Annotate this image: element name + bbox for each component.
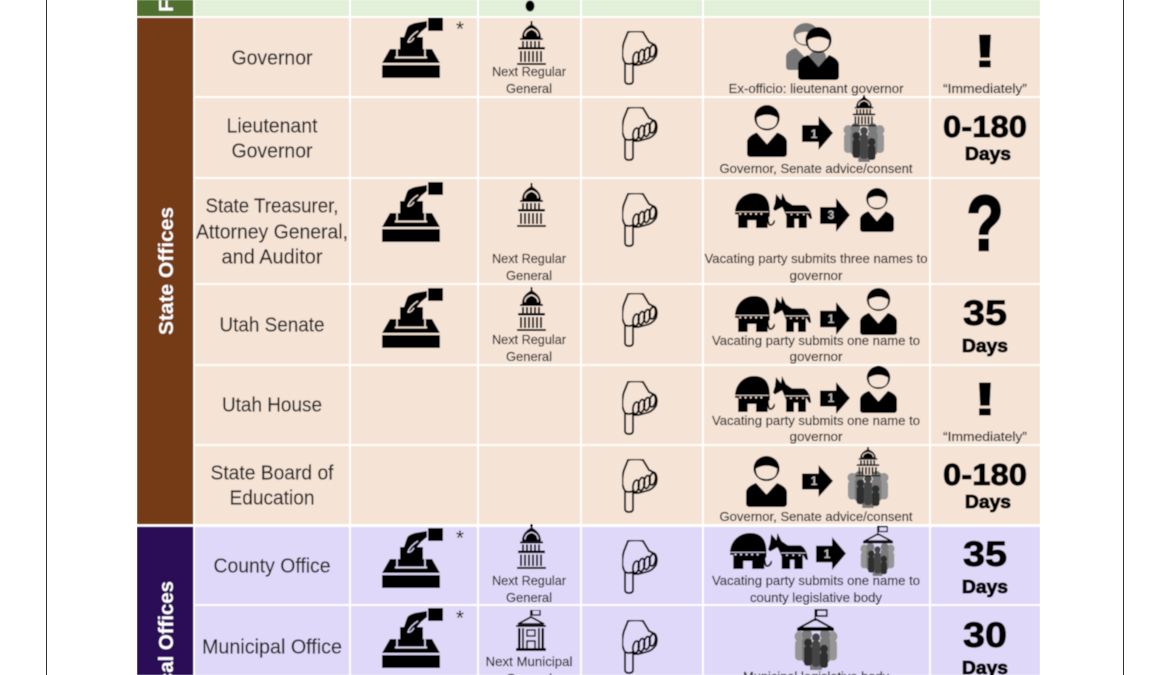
office name: Utah Senate: [220, 315, 324, 337]
table content: [137, 0, 1040, 675]
icon: thumb down: [622, 540, 657, 593]
icon: arrow 1: 1: [824, 547, 831, 561]
office name: Education: [230, 488, 314, 510]
caption: Vacating party submits three names to: [704, 251, 928, 266]
icon: governor: [747, 105, 787, 157]
icon: arrow 1: [820, 382, 850, 414]
row: municipal office: [195, 606, 1040, 675]
question mark: ?: [966, 179, 1004, 267]
office name: Utah House: [222, 395, 322, 417]
icon: thumb down: [622, 459, 657, 512]
office name: Governor: [232, 141, 313, 163]
caption: county legislative body: [750, 590, 882, 605]
days: Days: [965, 492, 1011, 512]
icon: parties: [735, 193, 812, 228]
caption: governor: [790, 349, 843, 364]
section label: state offices: State Offices: [155, 207, 178, 335]
icon: senate: [843, 95, 885, 162]
icon: arrow 1: 1: [828, 391, 835, 405]
caption: Governor, Senate advice/consent: [720, 161, 913, 176]
icon: arrow 3: [820, 198, 850, 232]
caption: Vacating party submits one name to: [712, 573, 920, 588]
icon: arrow 1: [820, 302, 850, 335]
bullet: [526, 0, 534, 12]
days: Days: [965, 144, 1011, 164]
next regular general: Next Regular: [492, 573, 567, 588]
icon: senate: [847, 447, 889, 508]
icon: ballot box: [382, 182, 443, 242]
icon: arrow 1: 1: [811, 474, 818, 488]
next regular general: General: [506, 590, 552, 605]
icon: governor: [746, 456, 787, 507]
office name: Municipal Office: [202, 637, 342, 659]
row: governor: [195, 18, 1040, 96]
icon: ballot box: [382, 608, 443, 668]
immediately: “Immediately”: [943, 429, 1027, 444]
icon: municipal legislative body: [794, 609, 838, 670]
days: 35: [963, 294, 1007, 333]
icon: ballot box: [382, 18, 443, 78]
icon: governor: [860, 288, 897, 335]
icon: arrow 1: 1: [828, 312, 835, 326]
caption: Ex-officio: lieutenant governor: [728, 81, 904, 96]
days: 30: [963, 616, 1007, 655]
icon: governor: [860, 366, 897, 413]
asterisk: *: [456, 527, 464, 550]
icon: parties: [730, 533, 808, 569]
days: 0-180: [943, 457, 1027, 492]
icon: capitol: [517, 21, 546, 65]
days: 35: [963, 535, 1007, 574]
icon: capitol: [517, 287, 546, 331]
immediately: “Immediately”: [943, 81, 1027, 96]
days: [962, 616, 1008, 675]
icon: thumb down: [622, 107, 657, 160]
section label: local offices: [137, 527, 193, 675]
icon: ex-officio persons: [786, 23, 839, 80]
icon: capitol: [517, 524, 546, 569]
icon: county legislative body: [860, 526, 895, 576]
office name: County Office: [214, 556, 330, 578]
icon: arrow 1: [816, 537, 846, 570]
office name: Attorney General,: [196, 222, 348, 244]
icon: capitol: [517, 183, 546, 227]
icon: arrow 1: 1: [811, 127, 818, 141]
next regular general: General: [506, 81, 552, 96]
next regular general: General: [506, 349, 552, 364]
icon: thumb down: [622, 381, 657, 434]
days: [962, 535, 1008, 597]
row: treasurer, attorney general, auditor: [195, 179, 1040, 283]
exclamation: !: [973, 373, 997, 425]
row: state board of education: [195, 446, 1040, 524]
days: 0-180: [943, 109, 1027, 144]
icon: arrow 1: [802, 465, 833, 497]
icon: thumb down: [622, 31, 657, 84]
caption: governor: [790, 429, 843, 444]
office name: State Treasurer,: [206, 196, 338, 218]
icon: thumb down: [622, 293, 657, 346]
caption: Vacating party submits one name to: [712, 413, 920, 428]
caption: Vacating party submits one name to: [712, 333, 920, 348]
row: utah house: [195, 366, 1040, 444]
icon: governor: [860, 188, 894, 232]
days: [962, 294, 1008, 356]
asterisk: *: [456, 607, 464, 630]
row: utah senate: [195, 285, 1040, 364]
icon: arrow 3: 3: [828, 208, 835, 222]
days: [943, 109, 1027, 164]
icon: thumb down: [622, 620, 657, 673]
row: lieutenant governor: [195, 95, 1040, 177]
exclamation: !: [973, 25, 997, 77]
section: federal offices (cropped): [137, 0, 1040, 16]
icon: ballot box: [382, 528, 443, 588]
icon: parties: [735, 376, 811, 412]
icon: thumb down: [622, 193, 657, 246]
icon: parties: [735, 296, 811, 332]
next regular general: General: [506, 268, 552, 283]
office name: State Board of: [210, 463, 334, 485]
icon: town hall: [516, 610, 546, 651]
section label: state offices: [137, 18, 193, 524]
asterisk: *: [456, 18, 464, 41]
office name: Governor: [232, 48, 313, 70]
next regular general: Next Regular: [492, 251, 567, 266]
office name: and Auditor: [222, 247, 323, 269]
days: [943, 457, 1027, 512]
row: county office: [195, 524, 1040, 605]
days: Days: [962, 577, 1008, 597]
office name: Lieutenant: [226, 116, 318, 138]
next regular general: Next Regular: [492, 64, 567, 79]
caption: governor: [790, 268, 843, 283]
caption: Governor, Senate advice/consent: [720, 509, 913, 524]
icon: ballot box: [382, 288, 443, 348]
next municipal general: Next Municipal: [486, 654, 573, 669]
icon: arrow 1: [802, 116, 833, 150]
days: Days: [962, 336, 1008, 356]
next regular general: Next Regular: [492, 332, 567, 347]
